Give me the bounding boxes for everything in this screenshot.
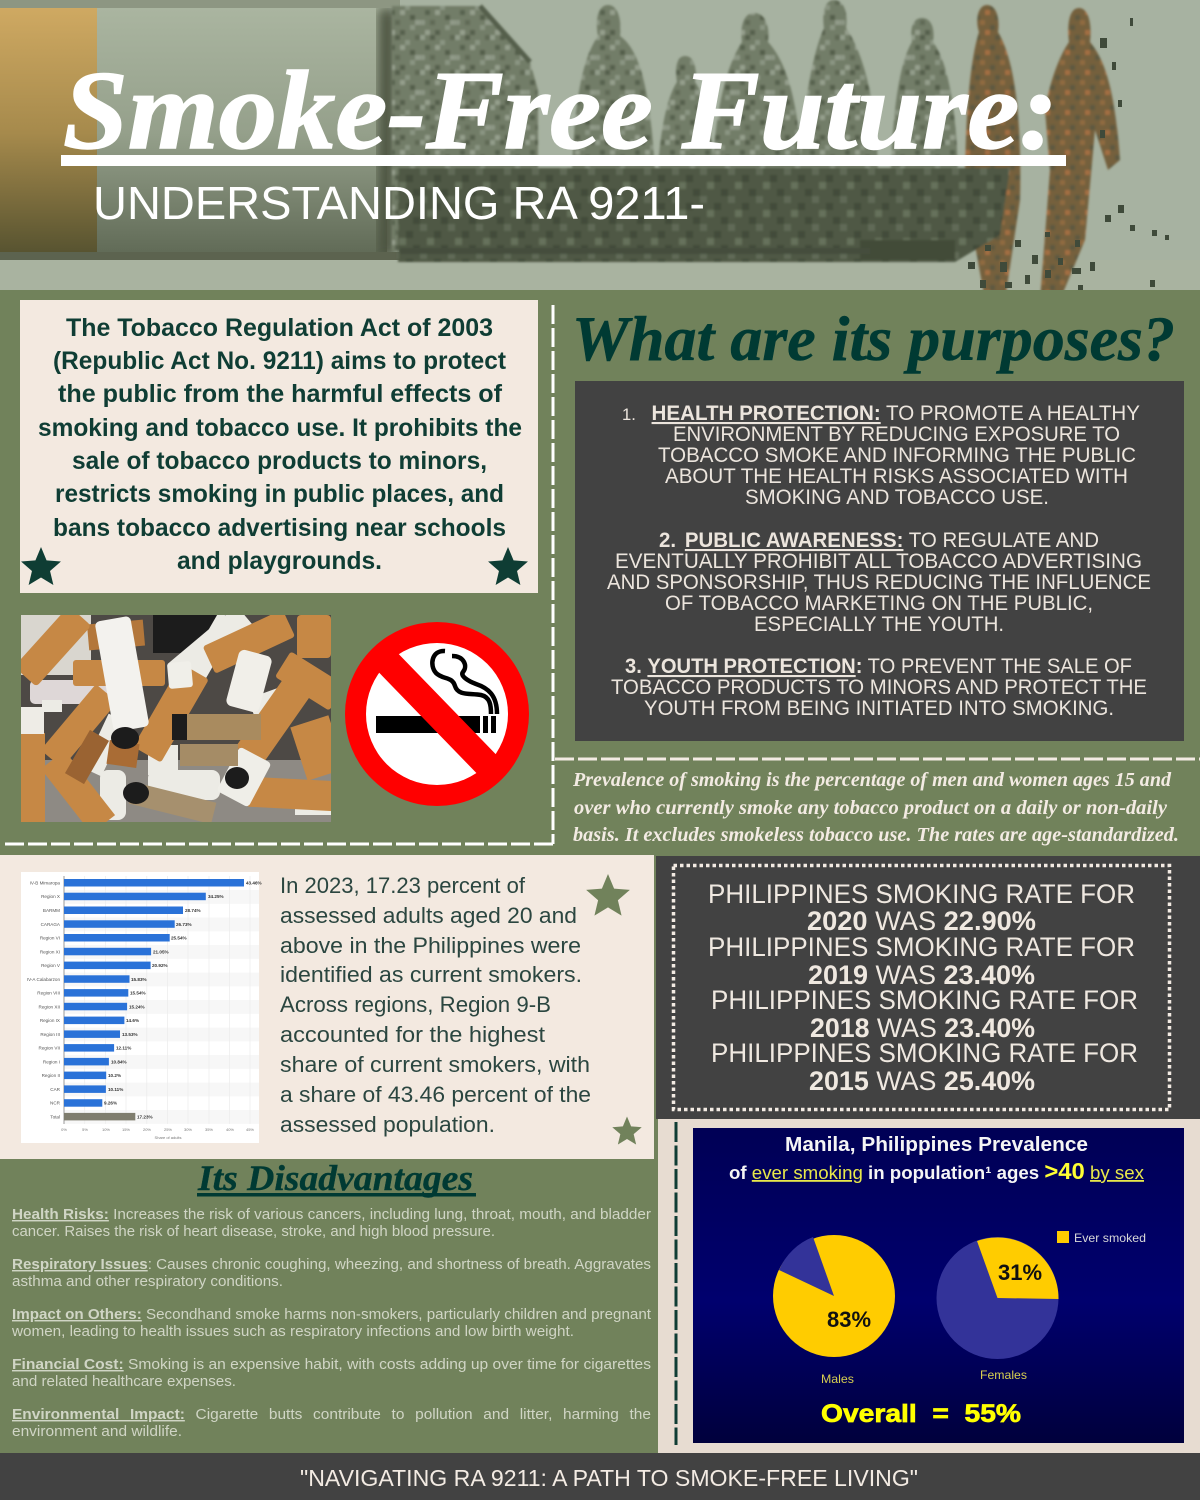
title underline <box>61 155 1066 166</box>
bar chart: smokers by region: 43.46% <box>246 880 262 886</box>
banner image: smoke-dissolving silhouettes <box>392 0 1120 300</box>
panel: purposes <box>575 381 1184 741</box>
ash tips <box>111 714 249 804</box>
panel: smoking rates <box>656 856 1200 1119</box>
text block: prevalence definition <box>572 769 1179 846</box>
bar chart: smokers by region: 15.24% <box>129 1004 145 1009</box>
title: Smoke-Free Future: <box>63 49 1058 173</box>
bar chart: smokers by region: BARMM <box>43 908 60 913</box>
panel: purposes: 2. PUBLIC AWARENESS: TO REGULATE AND <box>659 529 1099 552</box>
panel: smoking rates: PHILIPPINES SMOKING RATE FOR <box>708 879 1135 909</box>
photo: cigarette butts <box>21 615 331 822</box>
panel: disadvantages <box>0 1158 658 1453</box>
icon: star left <box>21 547 61 585</box>
chart: manila prevalence pies: Overall = 55% <box>821 1400 1021 1428</box>
icon: small star <box>612 1116 642 1145</box>
bar chart: smokers by region: 25% <box>164 1127 172 1132</box>
chart: manila prevalence pies: of ever smoking in population¹ ages >40 by sex <box>729 1158 1144 1184</box>
pie: males: 83% <box>827 1307 871 1332</box>
banner <box>0 0 1200 300</box>
background white filters <box>30 606 331 820</box>
panel: introduction: the public from the harmful effects of <box>58 380 503 408</box>
panel: smoking rates: PHILIPPINES SMOKING RATE FOR <box>711 985 1138 1015</box>
bar chart: smokers by region: 13.53% <box>122 1032 138 1037</box>
gold foil tips <box>187 714 261 740</box>
panel: disadvantages: environment and wildlife. <box>12 1424 182 1440</box>
bar chart: smokers by region: Region IX <box>40 1018 60 1023</box>
chart: manila prevalence pies: Manila, Philippines Prevalence <box>785 1134 1088 1156</box>
bar chart: smokers by region: 10.84% <box>111 1059 127 1064</box>
text block: regional summary <box>280 873 591 1137</box>
panel: smoking rates: 2019 WAS 23.40% <box>808 960 1035 990</box>
text block: prevalence definition: over who currently smoke any tobacco product on a daily or non-daily <box>574 797 1168 819</box>
panel: regional statistics <box>0 855 654 1159</box>
bar chart: smokers by region: 21.05% <box>153 949 169 954</box>
bar chart: smokers by region: 15.83% <box>131 977 147 982</box>
text block: regional summary: assessed population. <box>280 1112 495 1137</box>
text block: regional summary: In 2023, 17.23 percent of <box>280 873 526 898</box>
panel: purposes: TOBACCO PRODUCTS TO MINORS AND PROTECT THE <box>611 676 1147 699</box>
bar chart: smokers by region: 15.54% <box>130 991 146 996</box>
heading: what are its purposes: What are its purposes? <box>572 304 1175 374</box>
panel: introduction: and playgrounds. <box>177 547 382 575</box>
bar chart: smokers by region: Region X <box>41 894 60 899</box>
bar chart: smokers by region: 12.11% <box>116 1046 131 1051</box>
text block: prevalence definition: basis. It excludes smokeless tobacco use. The rates are age-standardized. <box>573 824 1179 846</box>
bar chart: smokers by region: Region VIII <box>37 991 60 996</box>
pie: males <box>773 1235 895 1357</box>
panel: purposes: SMOKING AND TOBACCO USE. <box>745 486 1049 509</box>
panel: disadvantages: women, leading to health issues such as respiratory infections and low birth weight. <box>11 1324 574 1340</box>
bar chart: smokers by region: Region XI <box>40 949 60 954</box>
icon: star right <box>488 547 528 585</box>
bar chart: smokers by region: Region III <box>40 1032 60 1037</box>
legend: ever smoked: Ever smoked <box>1074 1231 1146 1245</box>
panel: introduction: (Republic Act No. 9211) aims to protect <box>53 347 507 375</box>
icon: no smoking sign <box>345 622 529 806</box>
panel: purposes: ESPECIALLY THE YOUTH. <box>754 613 1004 636</box>
panel: introduction: restricts smoking in public places, and <box>55 480 504 508</box>
panel: introduction <box>20 300 538 593</box>
bar chart: smokers by region: 25.54% <box>171 936 187 940</box>
bar chart: smokers by region: Total <box>50 1114 60 1119</box>
chart: manila prevalence pies: Females <box>980 1368 1027 1382</box>
bar chart: smokers by region: 28.74% <box>185 908 201 913</box>
horizontal dashed divider <box>555 758 1200 760</box>
panel: disadvantages: cancer. Raises the risk of heart disease, stroke, and high blood pressure. <box>12 1224 495 1240</box>
bar chart: smokers by region: 15% <box>122 1127 130 1132</box>
bar chart: smokers by region: 40% <box>226 1127 234 1132</box>
panel: manila prevalence backdrop <box>658 1119 1200 1453</box>
chart: manila prevalence pies: Males <box>821 1372 854 1386</box>
bar chart: smokers by region: 35% <box>205 1127 213 1132</box>
panel: purposes: YOUTH FROM BEING INITIATED INTO SMOKING. <box>644 697 1114 720</box>
text block: regional summary: assessed adults aged 20 and <box>280 903 577 928</box>
bar chart: smokers by region: IV-A Calabarzon <box>27 977 60 982</box>
panel: disadvantages: Respiratory Issues : Causes chronic coughing, wheezing, and shortness of breath. Aggravates <box>12 1257 651 1273</box>
panel: disadvantages: Financial Cost: Smoking is an expensive habit, with costs adding up over time for cigarettes <box>12 1357 651 1373</box>
panel: disadvantages: Environmental Impact: Cigarette butts contribute to pollution and litter, harming the <box>12 1407 651 1423</box>
bar chart: smokers by region: 10.11% <box>108 1087 123 1092</box>
panel: introduction: The Tobacco Regulation Act of 2003 <box>66 314 493 342</box>
bar chart: smokers by region: 10.2% <box>108 1073 121 1078</box>
bar chart: smokers by region <box>21 872 262 1143</box>
panel: disadvantages: Impact on Others: Secondhand smoke harms non-smokers, particularly children and pregnant <box>12 1307 651 1323</box>
heading: its disadvantages: Its Disadvantages <box>197 1158 473 1198</box>
bar chart: smokers by region: 14.6% <box>126 1018 139 1023</box>
panel: introduction: bans tobacco advertising near schools <box>53 514 506 542</box>
text block: regional summary: accounted for the highest <box>280 1022 545 1047</box>
panel: purposes: 3. YOUTH PROTECTION: TO PREVENT THE SALE OF <box>625 655 1132 678</box>
footer: "NAVIGATING RA 9211: A PATH TO SMOKE-FREE LIVING" <box>300 1465 918 1491</box>
bar chart: smokers by region: 34.25% <box>208 894 224 899</box>
panel: purposes: TOBACCO SMOKE AND INFORMING THE PUBLIC <box>658 444 1136 467</box>
pie: females: 31% <box>998 1260 1042 1285</box>
bar chart: smokers by region: 20% <box>143 1127 151 1132</box>
panel: disadvantages: and related healthcare expenses. <box>12 1374 236 1390</box>
text block: regional summary: Across regions, Region 9-B <box>280 992 551 1017</box>
bar chart: smokers by region: Region VII <box>39 1046 60 1051</box>
bar chart: smokers by region: 45% <box>246 1127 254 1132</box>
bar chart: smokers by region: Region V <box>41 963 61 968</box>
panel: purposes: OF TOBACCO MARKETING ON THE PUBLIC, <box>665 592 1093 615</box>
bar chart: smokers by region: 10% <box>102 1127 110 1132</box>
bar chart: smokers by region: 20.92% <box>152 963 168 968</box>
bar chart: smokers by region: 17.23% <box>137 1114 153 1119</box>
bar chart: smokers by region: 5% <box>82 1127 88 1132</box>
panel: disadvantages: Health Risks: Increases the risk of various cancers, including lung, throat, mouth, and bladder <box>12 1207 651 1223</box>
text block: prevalence definition: Prevalence of smoking is the percentage of men and women ages 15 and <box>572 769 1172 791</box>
text block: regional summary: above in the Philippines were <box>280 933 581 958</box>
footer <box>0 1453 1200 1500</box>
pie: females <box>936 1237 1059 1359</box>
panel: disadvantages: asthma and other respiratory conditions. <box>12 1274 283 1290</box>
panel: introduction: smoking and tobacco use. It prohibits the <box>38 414 522 442</box>
panel: purposes: ABOUT THE HEALTH RISKS ASSOCIATED WITH <box>665 465 1128 488</box>
vertical dashed divider <box>5 305 553 844</box>
icon: large star <box>586 874 630 916</box>
bar chart: smokers by region: 9.26% <box>104 1101 117 1106</box>
panel: purposes: ENVIRONMENT BY REDUCING EXPOSURE TO <box>673 423 1120 446</box>
panel: smoking rates: 2020 WAS 22.90% <box>807 906 1036 936</box>
panel: smoking rates: 2018 WAS 23.40% <box>810 1013 1035 1043</box>
panel: purposes: AND SPONSORSHIP, THUS REDUCING THE INFLUENCE <box>607 571 1151 594</box>
white cigarette ends <box>95 616 149 732</box>
bar chart: smokers by region: Region VI <box>40 936 60 940</box>
bar chart: smokers by region: CARAGA <box>41 922 61 927</box>
bar chart: smokers by region: 30% <box>184 1127 192 1132</box>
chart: manila prevalence pies <box>693 1128 1184 1443</box>
subtitle: UNDERSTANDING RA 9211- <box>93 177 705 229</box>
bar chart: smokers by region: Region II <box>42 1073 60 1078</box>
panel: smoking rates: 2015 WAS 25.40% <box>809 1066 1035 1096</box>
bar chart: smokers by region: Region I <box>43 1059 60 1064</box>
panel: smoking rates: PHILIPPINES SMOKING RATE FOR <box>711 1038 1138 1068</box>
bar chart: smokers by region: 0% <box>61 1127 67 1132</box>
panel: purposes: 1. HEALTH PROTECTION: TO PROMOTE A HEALTHY <box>622 402 1140 425</box>
panel: smoking rates: PHILIPPINES SMOKING RATE FOR <box>708 932 1135 962</box>
panel: purposes: EVENTUALLY PROHIBIT ALL TOBACCO ADVERTISING <box>615 550 1142 573</box>
bar chart: smokers by region: 26.73% <box>176 922 192 927</box>
panel: introduction: sale of tobacco products to minors, <box>72 447 487 475</box>
bar chart: smokers by region: NCR <box>50 1101 61 1106</box>
text block: regional summary: a share of 43.46 percent of the <box>280 1082 591 1107</box>
text block: regional summary: share of current smokers, with <box>280 1052 590 1077</box>
bar chart: smokers by region: IV-B Mimaropa <box>30 880 60 886</box>
text block: regional summary: identified as current smokers. <box>280 962 582 987</box>
bar chart: smokers by region: Share of adults <box>155 1135 181 1140</box>
bar chart: smokers by region: CAR <box>50 1087 61 1092</box>
bar chart: smokers by region: Region XII <box>39 1004 60 1009</box>
